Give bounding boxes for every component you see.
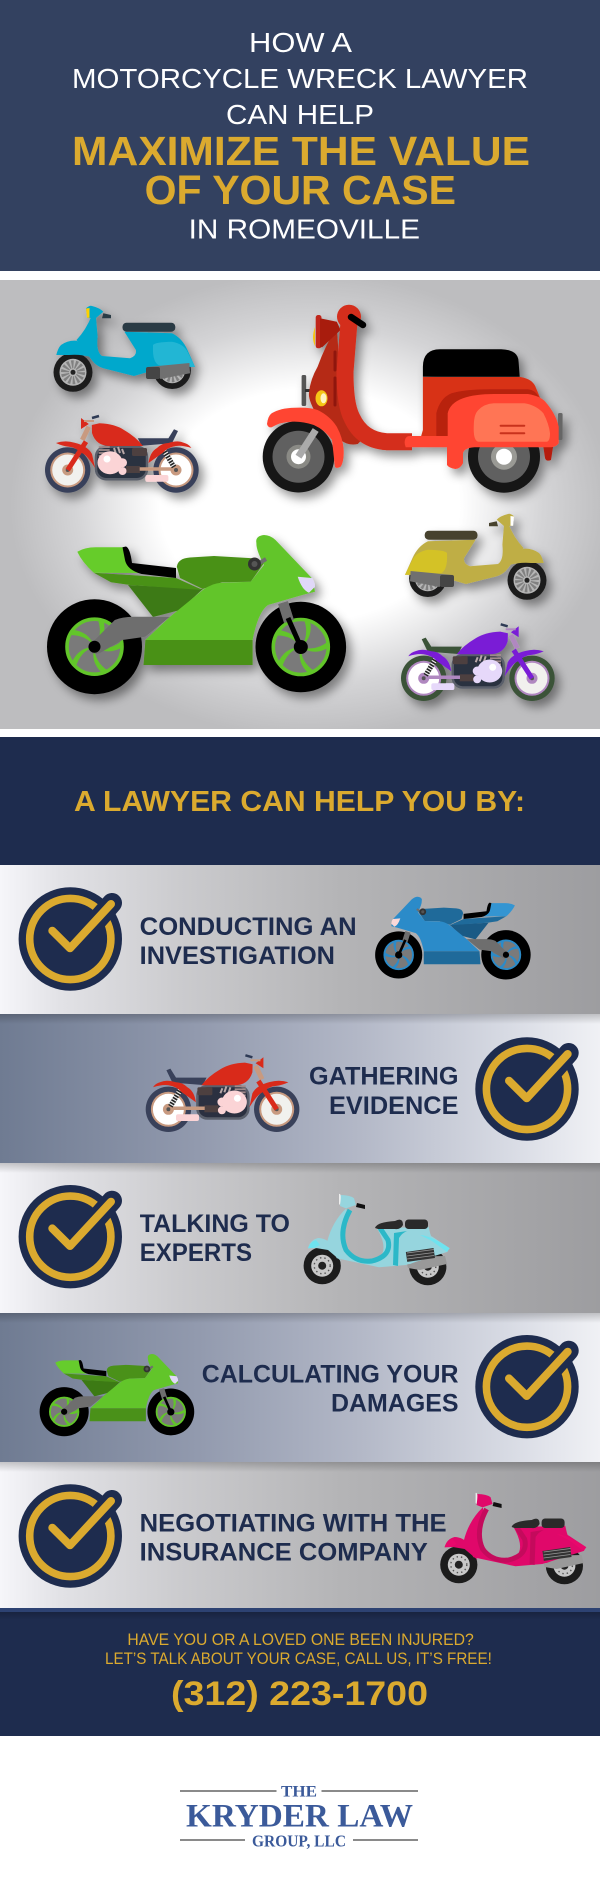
panel: call to action [0,1608,600,1736]
text: negotiating with the insurance company: INSURANCE COMPANY [140,1539,428,1567]
heading panel: a lawyer can help [0,737,600,865]
logo: the kryder law group: GROUP, LLC [252,1832,346,1851]
text: gathering evidence [309,1063,458,1120]
panel: motorcycle collection [0,280,600,729]
row: gathering evidence [0,1014,600,1163]
illustration: pale blue scooter [304,1194,450,1285]
logo: the kryder law group: THE [281,1784,317,1801]
text: talking to experts: TALKING TO [140,1210,290,1238]
icon: check mark [475,1037,579,1141]
text: question: HAVE YOU OR A LOVED ONE BEEN INJURED? [127,1630,474,1649]
title: location: IN ROMEOVILLE [189,214,420,245]
illustration: blue sport bike [375,897,531,979]
illustration: red cafe racer [45,416,199,493]
icon: check mark [19,1484,122,1588]
row: talking to experts [0,1163,600,1313]
text: invitation: LET’S TALK ABOUT YOUR CASE, CALL US, IT’S FREE! [105,1649,492,1668]
text: negotiating with the insurance company: NEGOTIATING WITH THE [140,1510,447,1538]
row: calculating your damages [0,1313,600,1462]
text: calculating your damages [202,1361,458,1418]
text: conducting an investigation: CONDUCTING AN [140,913,357,941]
illustration: green sport bike [47,535,346,694]
text: conducting an investigation: INVESTIGATION [140,942,335,970]
phone number: (312) 223-1700 [171,1675,428,1713]
title: subject line: MOTORCYCLE WRECK LAWYER [72,63,528,94]
text: calculating your damages: DAMAGES [331,1390,458,1418]
illustration: purple cafe racer [401,624,555,701]
title: gold emphasis line one: MAXIMIZE THE VALUE [72,128,530,174]
illustration: big red scooter [263,305,563,493]
text: talking to experts [140,1210,290,1267]
illustration: yellow vespa [405,514,546,600]
text: gathering evidence: GATHERING [309,1063,458,1091]
text: conducting an investigation [140,913,357,970]
row: negotiating with the insurance company [0,1462,600,1608]
heading text: A LAWYER CAN HELP YOU BY: [74,786,525,818]
illustration: pink scooter [440,1493,586,1584]
title: gold emphasis line two: OF YOUR CASE [145,167,456,213]
title: lead-in text: HOW A [249,27,352,58]
icon: check mark [19,1185,122,1288]
icon: check mark [475,1335,579,1438]
title banner [0,0,600,271]
text: gathering evidence: EVIDENCE [329,1092,458,1120]
text: talking to experts: EXPERTS [140,1239,252,1267]
text: calculating your damages: CALCULATING YOUR [202,1361,458,1389]
illustration: red cafe racer [146,1055,299,1132]
illustration: green sport bike [40,1354,194,1436]
title: can help: CAN HELP [226,99,374,130]
illustration: teal vespa [54,306,195,392]
text: negotiating with the insurance company [140,1510,447,1567]
logo: the kryder law group [180,1784,418,1851]
logo: the kryder law group: KRYDER LAW [186,1799,413,1835]
icon: check mark [19,887,122,991]
row: conducting an investigation [0,865,600,1014]
